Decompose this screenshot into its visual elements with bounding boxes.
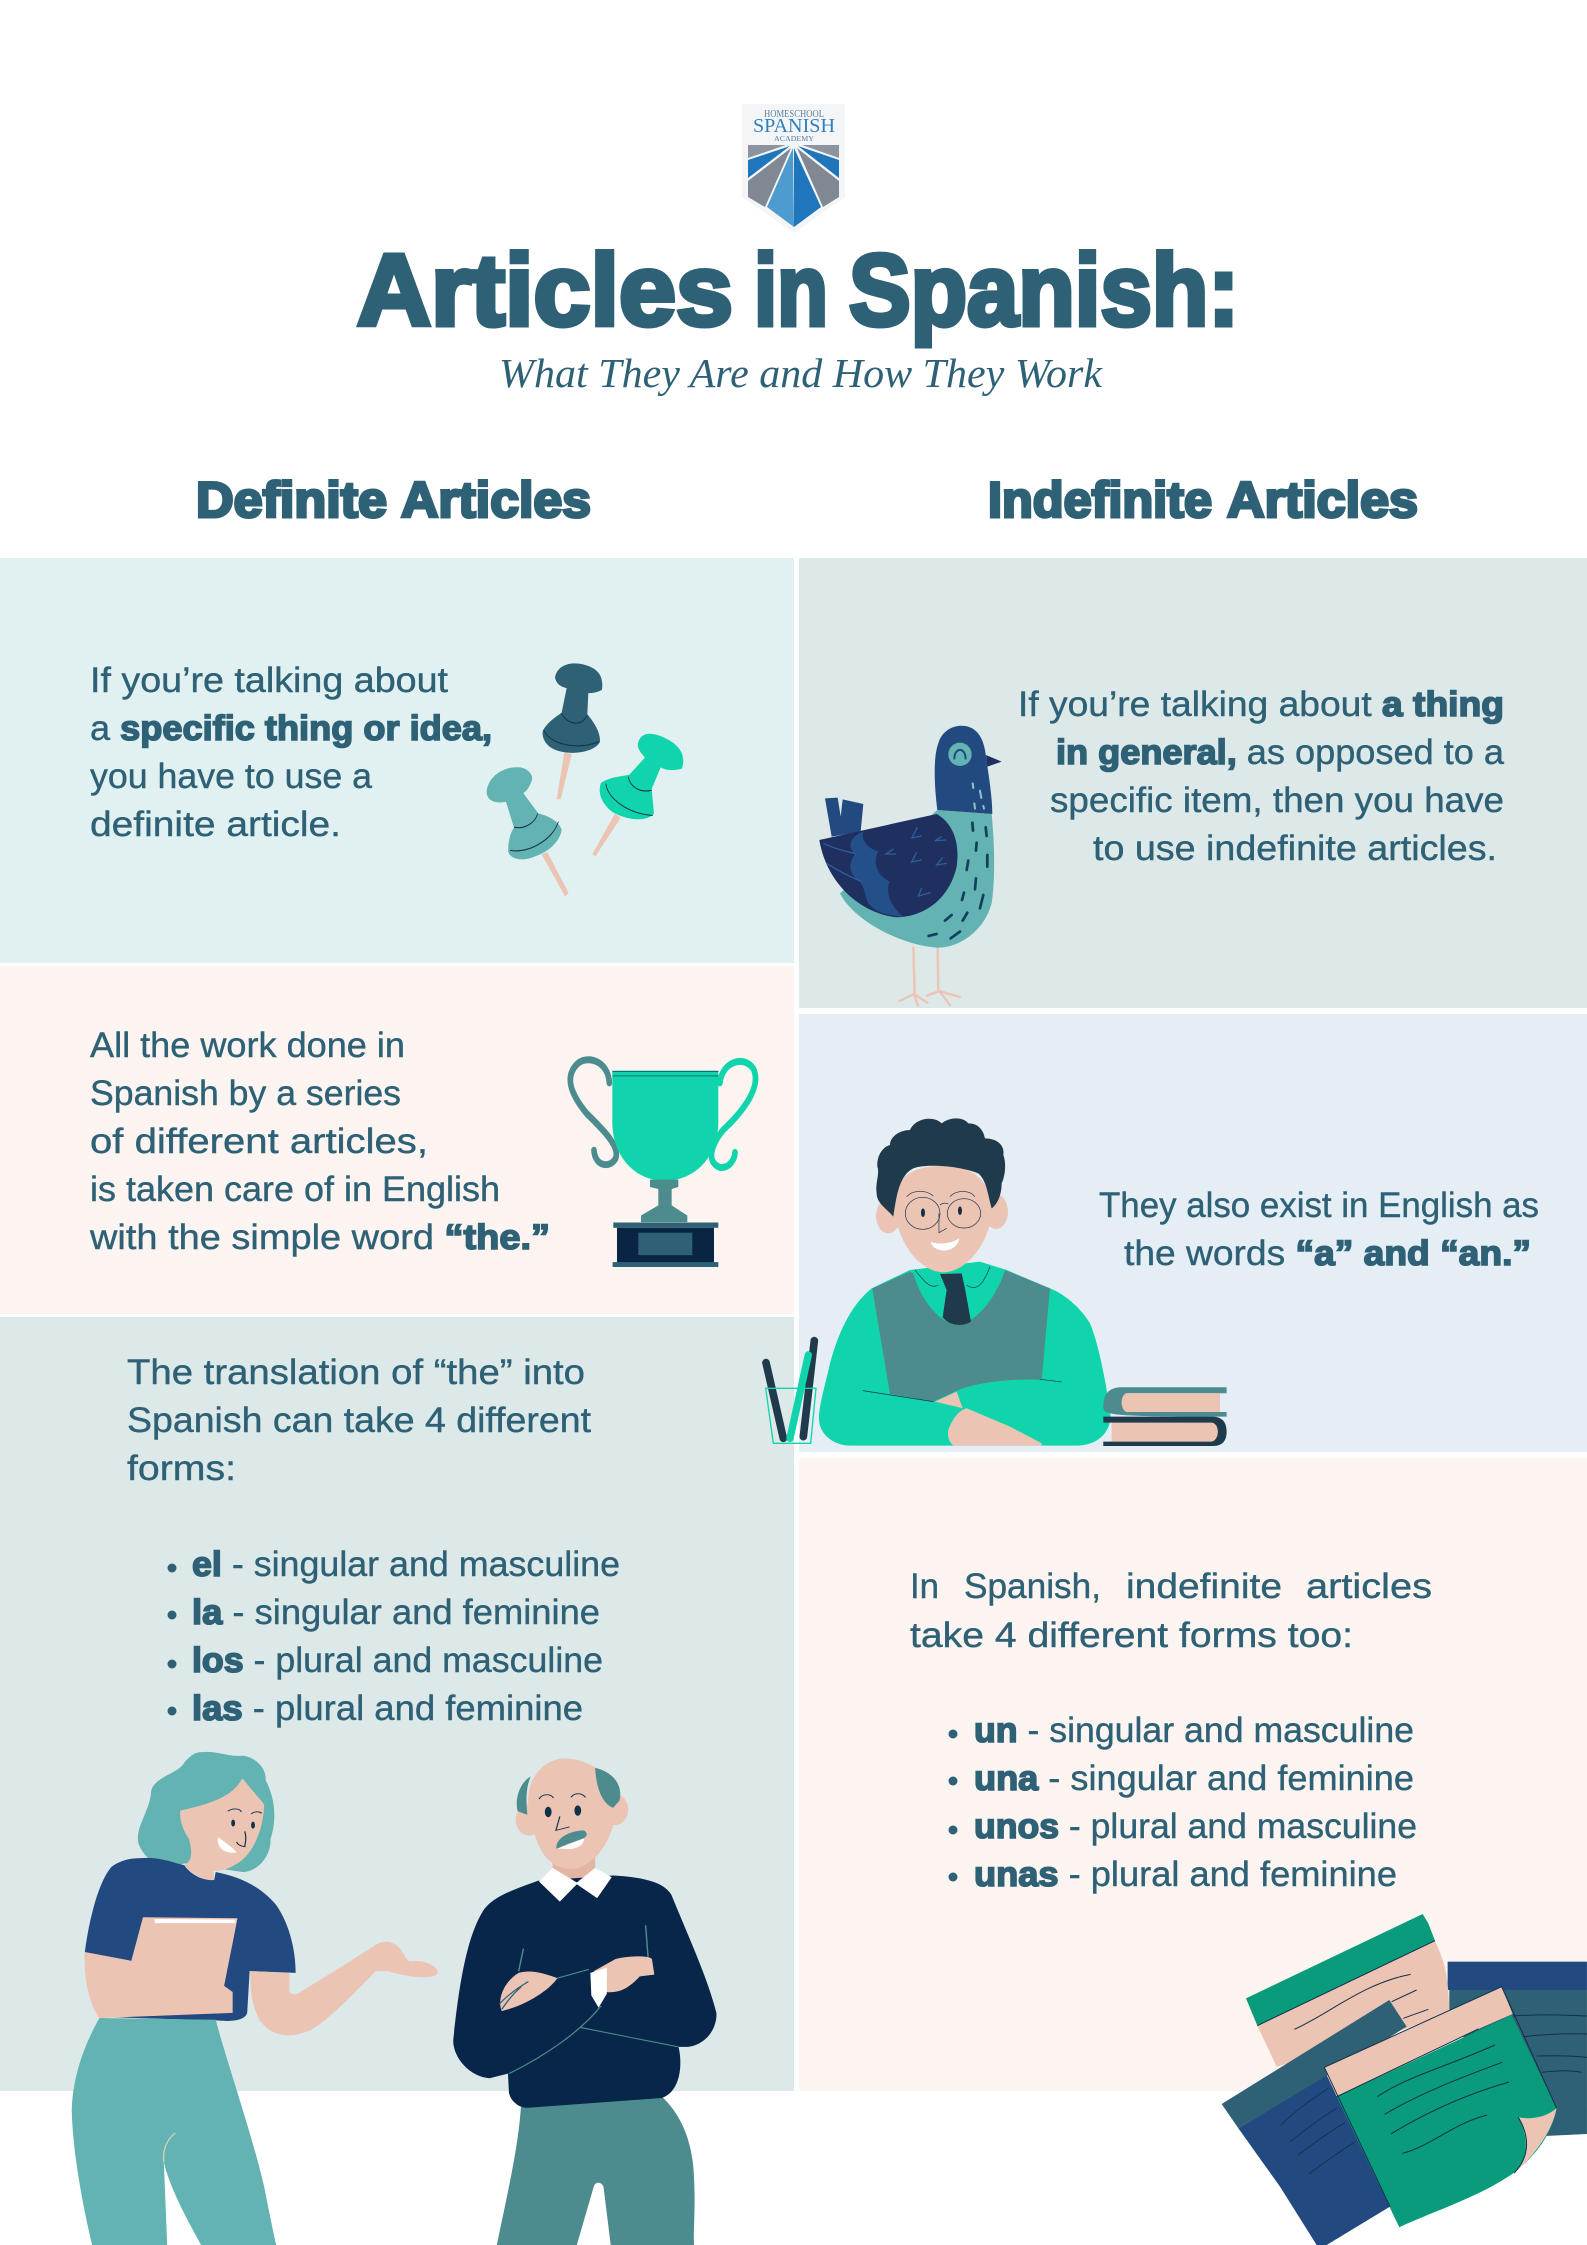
subtitle: What They Are and How They Work [499,350,1103,396]
text block: specific thing: a specific thing or idea, [90,709,492,748]
text block: translation forms of the: las - plural and feminine [192,1689,583,1728]
panel: indefinite in English [799,1014,1587,1452]
text block: they also exist in English [1099,1186,1539,1273]
stack of books [1103,1387,1227,1446]
text block: specific thing: If you’re talking about [90,661,448,700]
text block: specific thing: you have to use a [90,757,373,796]
text block: translation forms of the: Spanish can take 4 different [127,1401,591,1440]
panel: definite specific thing [0,558,794,963]
text block: the word the: Spanish by a series [90,1074,401,1113]
text block: translation forms of the: The translation of “the” into [127,1353,585,1392]
text block: indefinite forms: unos - plural and masculine [974,1807,1417,1846]
icon: trophy [570,1060,755,1267]
text block: translation forms of the: los - plural and masculine [192,1641,603,1680]
panel: indefinite four forms [799,1458,1587,2091]
text block: indefinite forms: articles [1306,1567,1432,1606]
text block: indefinite forms: una - singular and feminine [974,1759,1414,1798]
text block: the word the: of different articles, [90,1122,428,1161]
text block: translation forms of the: el - singular and masculine [192,1545,620,1584]
logo: Homeschool Spanish Academy shield: HOMESCHOOL [764,109,824,120]
icon: pigeon [819,726,1002,1007]
text block: the word the: All the work done in [90,1026,405,1065]
text block: in general [1018,685,1505,868]
title: Spanish: [849,235,1239,347]
text block: in general: to use indefinite articles. [1093,829,1497,868]
teacher figure [819,1118,1111,1446]
logo: Homeschool Spanish Academy shield: SPANISH [753,115,835,137]
text block: indefinite forms: unas - plural and feminine [974,1855,1397,1894]
heading: indefinite articles: Indefinite [988,472,1212,528]
text block: indefinite forms: un - singular and masculine [974,1711,1414,1750]
text block: indefinite forms: Spanish, [964,1567,1101,1606]
illustration: woman holding a book [72,1752,438,2245]
text block: in general: If you’re talking about a thing [1018,685,1504,724]
text block: the word the [89,1026,550,1257]
illustration: man with crossed arms [453,1758,716,2245]
text block: indefinite forms: take 4 different forms too: [910,1616,1353,1655]
illustration: teacher at desk with pencil cup and books [766,1118,1227,1446]
logo: Homeschool Spanish Academy shield: ACADEMY [774,135,814,143]
text block: the word the: with the simple word “the.” [89,1218,550,1257]
text block: translation forms of the: forms: [127,1449,236,1488]
panel: indefinite in general [799,558,1587,1008]
icon: three push pins [487,663,683,896]
title: in [754,235,828,347]
text block: specific thing: definite article. [90,805,341,844]
text block: specific thing [90,661,492,844]
text block: indefinite forms: In [910,1567,939,1606]
text block: indefinite forms [910,1567,1432,1894]
heading: definite articles: Articles [401,472,591,528]
panel: definite four forms [0,1317,794,2091]
panel: definite the word the [0,966,794,1314]
text block: in general: in general, as opposed to a [1056,733,1505,772]
pencil cup [766,1341,816,1443]
logo: Homeschool Spanish Academy shield [742,104,845,233]
text block: translation forms of the [127,1353,620,1728]
heading: definite articles: Definite [196,472,387,528]
heading: indefinite articles: Articles [1227,472,1418,528]
text block: indefinite forms: indefinite [1126,1567,1282,1606]
title: Articles [357,235,733,347]
illustration: stack of papers [1222,1914,1587,2245]
text block: translation forms of the: la - singular and feminine [192,1593,600,1632]
text block: in general: specific item, then you have [1050,781,1504,820]
text block: the word the: is taken care of in English [90,1170,500,1209]
text block: they also exist in English: the words “a” and “an.” [1124,1234,1531,1273]
text block: they also exist in English: They also exist in English as [1099,1186,1539,1225]
